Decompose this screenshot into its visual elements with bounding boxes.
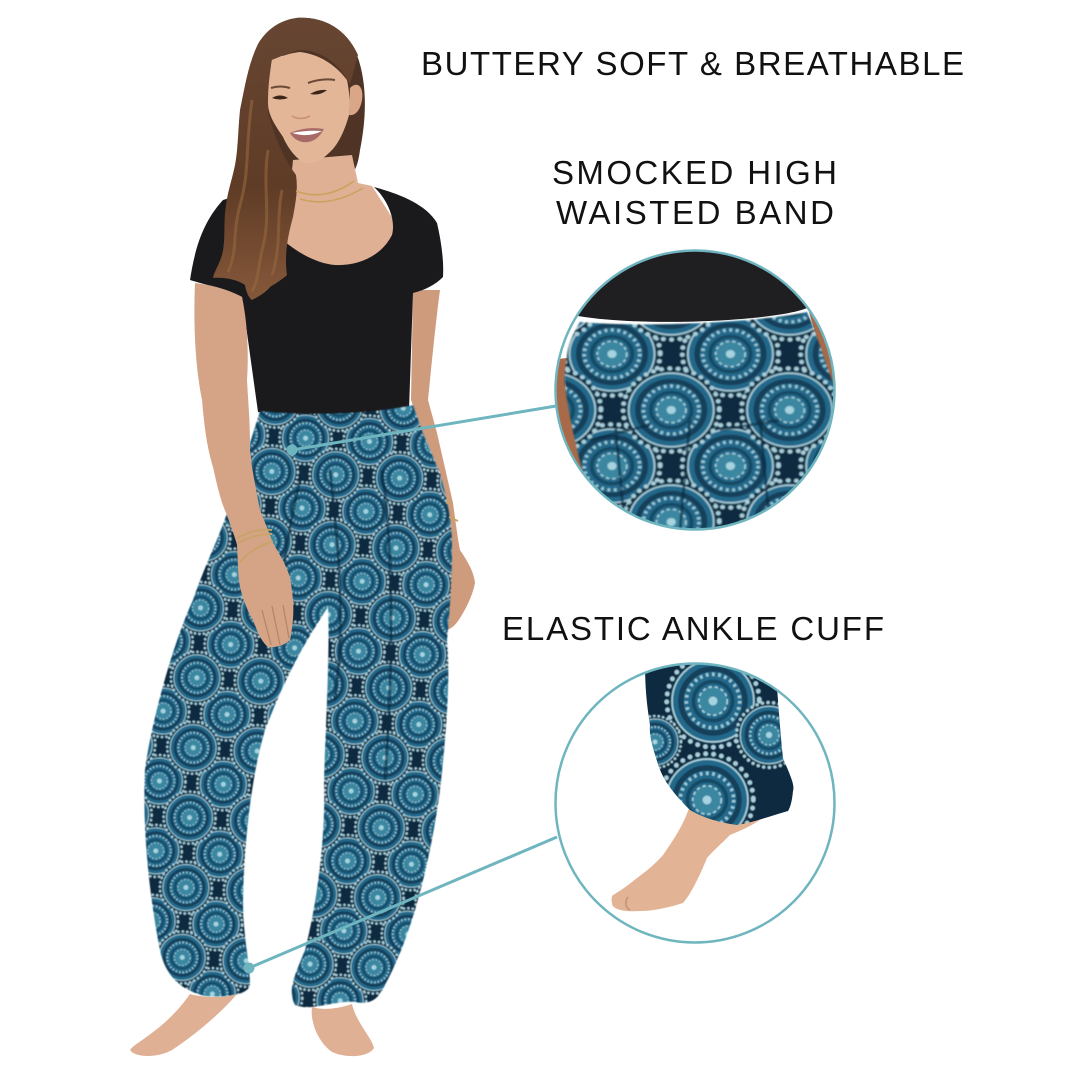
foot close-up [612,805,770,911]
left foot [130,994,237,1056]
hair highlights [228,100,282,292]
neck and chest [275,155,400,275]
black top [190,187,443,415]
callout circle: waistband detail [550,250,840,540]
smile [290,128,324,142]
eyes and brows [271,79,335,88]
bracelets [237,502,458,562]
hair behind shoulder [260,18,365,190]
pointer line: waistband [286,406,556,456]
cuff close-up [645,664,794,825]
right arm [411,290,475,630]
front hair [213,18,358,300]
toes [626,897,630,910]
face [268,52,350,163]
callout circle: ankle cuff detail [555,655,835,943]
right foot [312,1004,374,1056]
heading: buttery soft: BUTTERY SOFT & BREATHABLE [421,45,964,82]
ear [349,85,362,115]
fingers [262,605,289,645]
necklace [296,181,363,202]
heading: smocked band: SMOCKED HIGH [552,154,837,191]
heading: ankle cuff: ELASTIC ANKLE CUFF [502,610,884,647]
model figure [130,18,475,1056]
pointer line: ankle cuff [244,837,557,974]
pants [144,405,452,1007]
left arm and hand [194,283,293,647]
nose [292,116,310,118]
heading: smocked band: WAISTED BAND [556,194,834,231]
heading: smocked band [552,154,837,231]
